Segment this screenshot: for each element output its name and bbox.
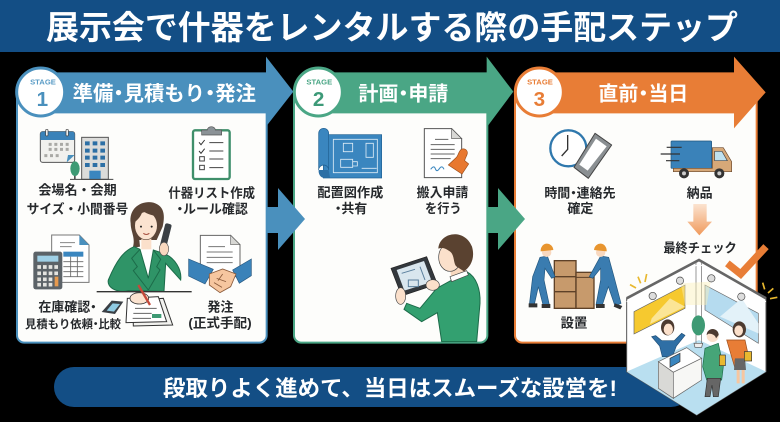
label: time and contact <box>544 185 616 216</box>
label: fixture list <box>168 185 255 217</box>
bottom banner <box>54 367 691 407</box>
icon: blueprint <box>319 128 382 178</box>
icon: calculator and spreadsheet <box>33 235 89 289</box>
label: venue and booth <box>27 183 128 216</box>
stage badge 3: 3 <box>534 88 545 111</box>
icon: clipboard checklist <box>193 127 230 179</box>
icon: clock and smartphone <box>550 130 612 178</box>
label: fixture list: 什器リスト作成 <box>168 185 255 200</box>
icon: document with stamp <box>424 129 469 178</box>
label: delivery application <box>417 185 468 216</box>
label: installation: 設置 <box>561 315 587 330</box>
label: order: 発注 <box>207 299 233 314</box>
arrow: down to final check <box>687 204 712 235</box>
label: delivery: 納品 <box>687 185 713 200</box>
panel: stage 2 <box>294 57 513 343</box>
arrow: stage 2 to stage 3 <box>487 188 525 250</box>
icon: orange check mark <box>727 247 766 274</box>
panel: stage 3 <box>515 57 777 415</box>
icon: delivery truck <box>661 141 732 178</box>
label: delivery application: 搬入申請 <box>417 185 468 200</box>
stage badge 3 <box>515 68 563 116</box>
illustration: workers installing fixtures <box>529 244 622 309</box>
header arrow: stage 2 <box>317 57 513 127</box>
title band <box>0 0 780 52</box>
label: order: (正式手配) <box>188 315 252 330</box>
label: time and contact: 確定 <box>567 201 593 216</box>
heading: stage 1: 準備・見積もり・発注 <box>73 83 256 106</box>
label: delivery application: を行う <box>425 201 462 216</box>
stage badge 2: 2 <box>313 88 324 111</box>
header arrow: stage 1 <box>40 57 293 127</box>
label: venue and booth: 会場名・会期 <box>38 183 117 198</box>
arrow: stage 1 to stage 2 <box>267 188 305 250</box>
icon: calendar and building <box>40 129 113 179</box>
stage badge 2 <box>294 68 342 116</box>
illustration: man with tablet <box>391 234 480 342</box>
label: time and contact: 時間・連絡先 <box>544 185 616 200</box>
label: layout drawing: ・共有 <box>332 201 367 216</box>
header arrow: stage 3 <box>538 57 766 128</box>
label: venue and booth: サイズ・小間番号 <box>27 201 128 216</box>
illustration: exhibition booth <box>627 260 777 415</box>
label: fixture list: ・ルール確認 <box>173 202 248 217</box>
illustration: woman on phone at desk <box>97 202 192 326</box>
panel: stage 1 <box>17 57 293 343</box>
stage badge 2: STAGE <box>306 77 332 86</box>
label: layout drawing: 配置図作成 <box>317 185 383 200</box>
stage badge 1: 1 <box>37 88 48 111</box>
label: final check: 最終チェック <box>663 240 737 255</box>
heading: stage 3: 直前・当日 <box>598 83 688 106</box>
label: stock and quote: 在庫確認・ <box>38 299 100 314</box>
title band: 展示会で什器をレンタルする際の手配ステップ <box>46 9 738 46</box>
stage badge 1 <box>17 68 65 116</box>
bottom banner: 段取りよく進めて、当日はスムーズな設営を! <box>163 376 617 401</box>
icon: contract and handshake <box>189 235 251 293</box>
stage badge 3: STAGE <box>527 77 553 86</box>
label: stock and quote: 見積もり依頼・比較 <box>25 317 122 331</box>
label: stock and quote <box>25 299 122 331</box>
heading: stage 2: 計画・申請 <box>358 83 448 106</box>
label: layout drawing <box>317 185 383 216</box>
label: order <box>188 299 252 330</box>
stage badge 1: STAGE <box>30 77 56 86</box>
